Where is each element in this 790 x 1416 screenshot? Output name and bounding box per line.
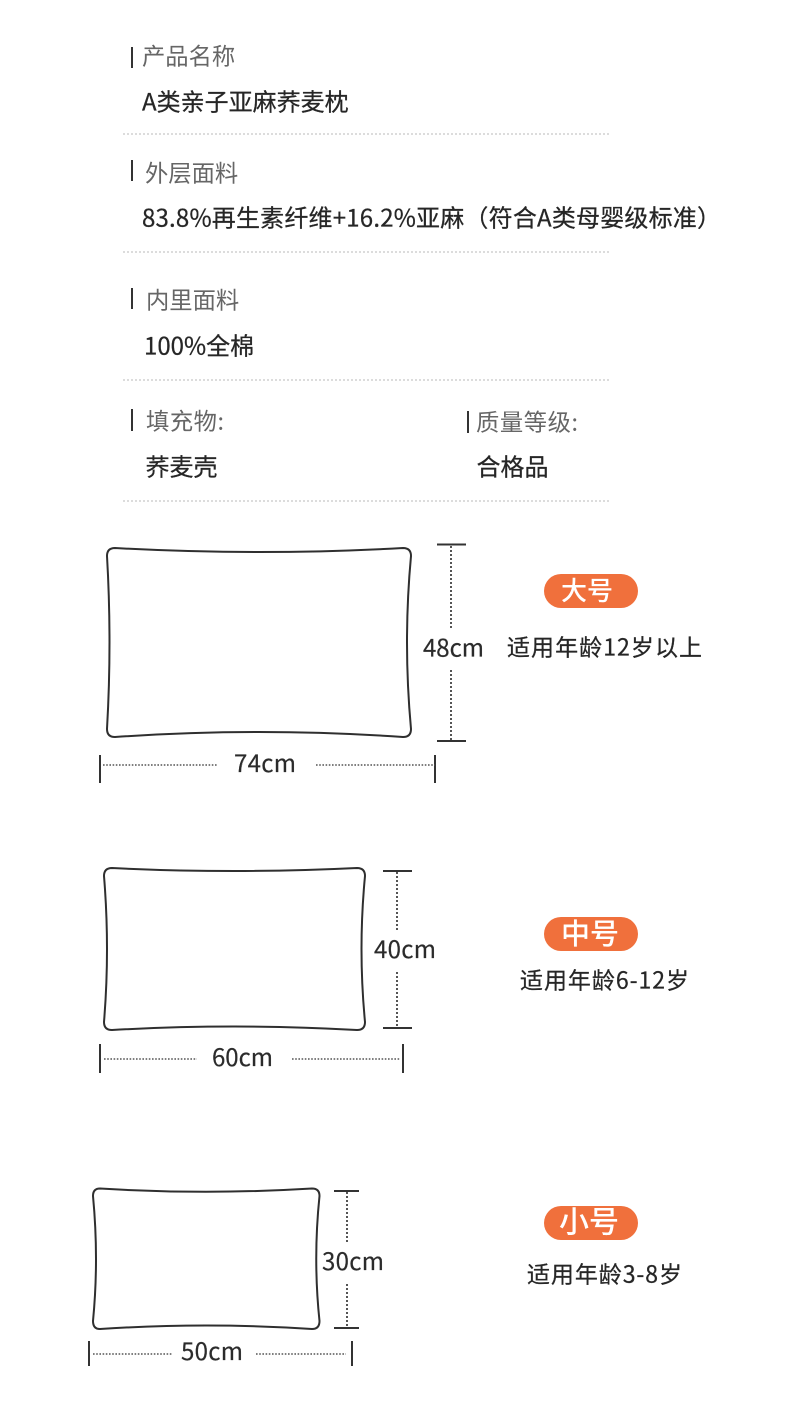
spec: outer fabric: 83.8%再生素纤维+16.2%亚麻（符合A类母婴级标准） — [142, 198, 721, 234]
dimension: small height: 30cm — [322, 1242, 384, 1277]
spec: outer fabric: 外层面料 — [145, 154, 238, 188]
spec: quality grade — [468, 404, 578, 482]
panel: medium size — [100, 868, 689, 1073]
badge: large — [544, 571, 638, 608]
spec: filling: 填充物: — [146, 402, 224, 436]
spec: filling: 荞麦壳 — [146, 448, 218, 482]
dimension: large width: 74cm — [234, 744, 296, 779]
spec: inner fabric — [132, 282, 254, 362]
icon: large pillow outline — [107, 548, 411, 737]
panel: large size — [100, 544, 702, 783]
dimension: medium width: 60cm — [212, 1038, 273, 1073]
spec: inner fabric: 100%全棉 — [144, 326, 254, 362]
dimension: small width: 50cm — [181, 1332, 243, 1367]
badge: medium: 中号 — [561, 911, 619, 953]
panel: product specifications — [123, 38, 721, 501]
dimension: small height — [322, 1191, 384, 1328]
dimension: large height: 48cm — [423, 628, 484, 664]
caption: medium age range: 适用年龄6-12岁 — [520, 962, 689, 996]
spec: quality grade: 合格品 — [476, 448, 548, 482]
badge: small: 小号 — [559, 1198, 619, 1242]
spec: product name: 产品名称 — [142, 38, 235, 72]
badge: medium — [544, 911, 638, 953]
caption: small age range: 适用年龄3-8岁 — [527, 1256, 682, 1290]
badge: small — [544, 1198, 638, 1242]
icon: medium pillow outline — [104, 868, 365, 1030]
spec: inner fabric: 内里面料 — [146, 282, 239, 316]
spec: product name — [132, 38, 349, 118]
spec: quality grade: 质量等级: — [476, 404, 578, 438]
caption: large age range: 适用年龄12岁以上 — [507, 628, 702, 662]
icon: small pillow outline — [93, 1188, 320, 1329]
spec: filling — [132, 402, 224, 482]
panel: small size — [89, 1188, 682, 1367]
spec: outer fabric — [132, 154, 721, 234]
badge: large: 大号 — [561, 571, 613, 608]
spec: product name: A类亲子亚麻荞麦枕 — [142, 82, 349, 118]
dimension: medium height: 40cm — [374, 930, 436, 965]
